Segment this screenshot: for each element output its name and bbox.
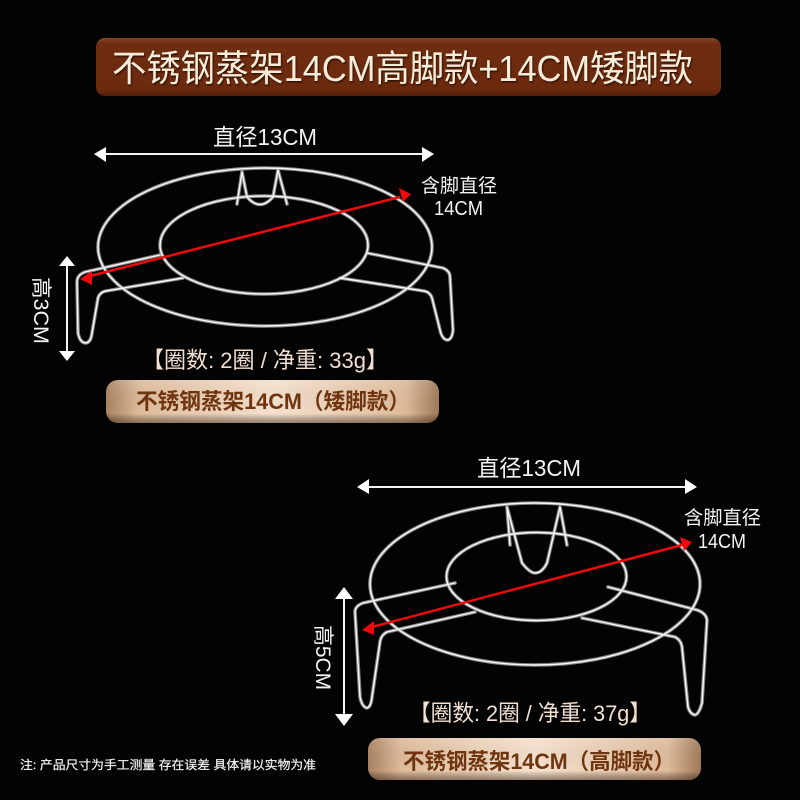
title banner: 不锈钢蒸架14CM高脚款+14CM矮脚款 [112,48,693,89]
dimension: diameter with feet 14CM [80,175,497,285]
dimension: height 5CM [311,587,353,726]
label: short-leg model [106,380,439,423]
dimension: diameter with feet 14CM: 含脚直径 [684,507,761,529]
label: tall-leg model: 不锈钢蒸架14CM（高脚款） [403,749,675,774]
dimension: height 3CM [29,256,75,361]
label: short-leg model: 不锈钢蒸架14CM（矮脚款） [136,389,410,414]
dimension: height 3CM: 高3CM [29,277,52,344]
dimension: diameter 13CM: 直径13CM [213,124,317,150]
dimension: diameter 13CM [94,124,434,162]
dimension: height 5CM: 高5CM [311,625,334,690]
icon: tall-leg steel rack [355,503,707,715]
title banner [96,38,721,96]
dimension: diameter 13CM [357,455,697,494]
dimension: diameter with feet 14CM: 14CM [434,198,483,220]
spec: rings and weight: 【圈数: 2圈 / 净重: 33g】 [142,348,388,373]
panel: tall-leg rack [311,455,761,780]
dimension: diameter with feet 14CM: 含脚直径 [421,175,497,197]
dimension: diameter with feet 14CM: 14CM [698,531,746,553]
spec: rings and weight: 【圈数: 2圈 / 净重: 37g】 [409,701,651,726]
footnote: 注: 产品尺寸为手工测量 存在误差 具体请以实物为准 [20,757,316,772]
dimension: diameter with feet 14CM [362,507,761,635]
label: tall-leg model [368,738,701,780]
dimension: diameter 13CM: 直径13CM [477,455,581,481]
panel: short-leg rack [29,124,497,423]
icon: short-leg steel rack [77,168,453,343]
